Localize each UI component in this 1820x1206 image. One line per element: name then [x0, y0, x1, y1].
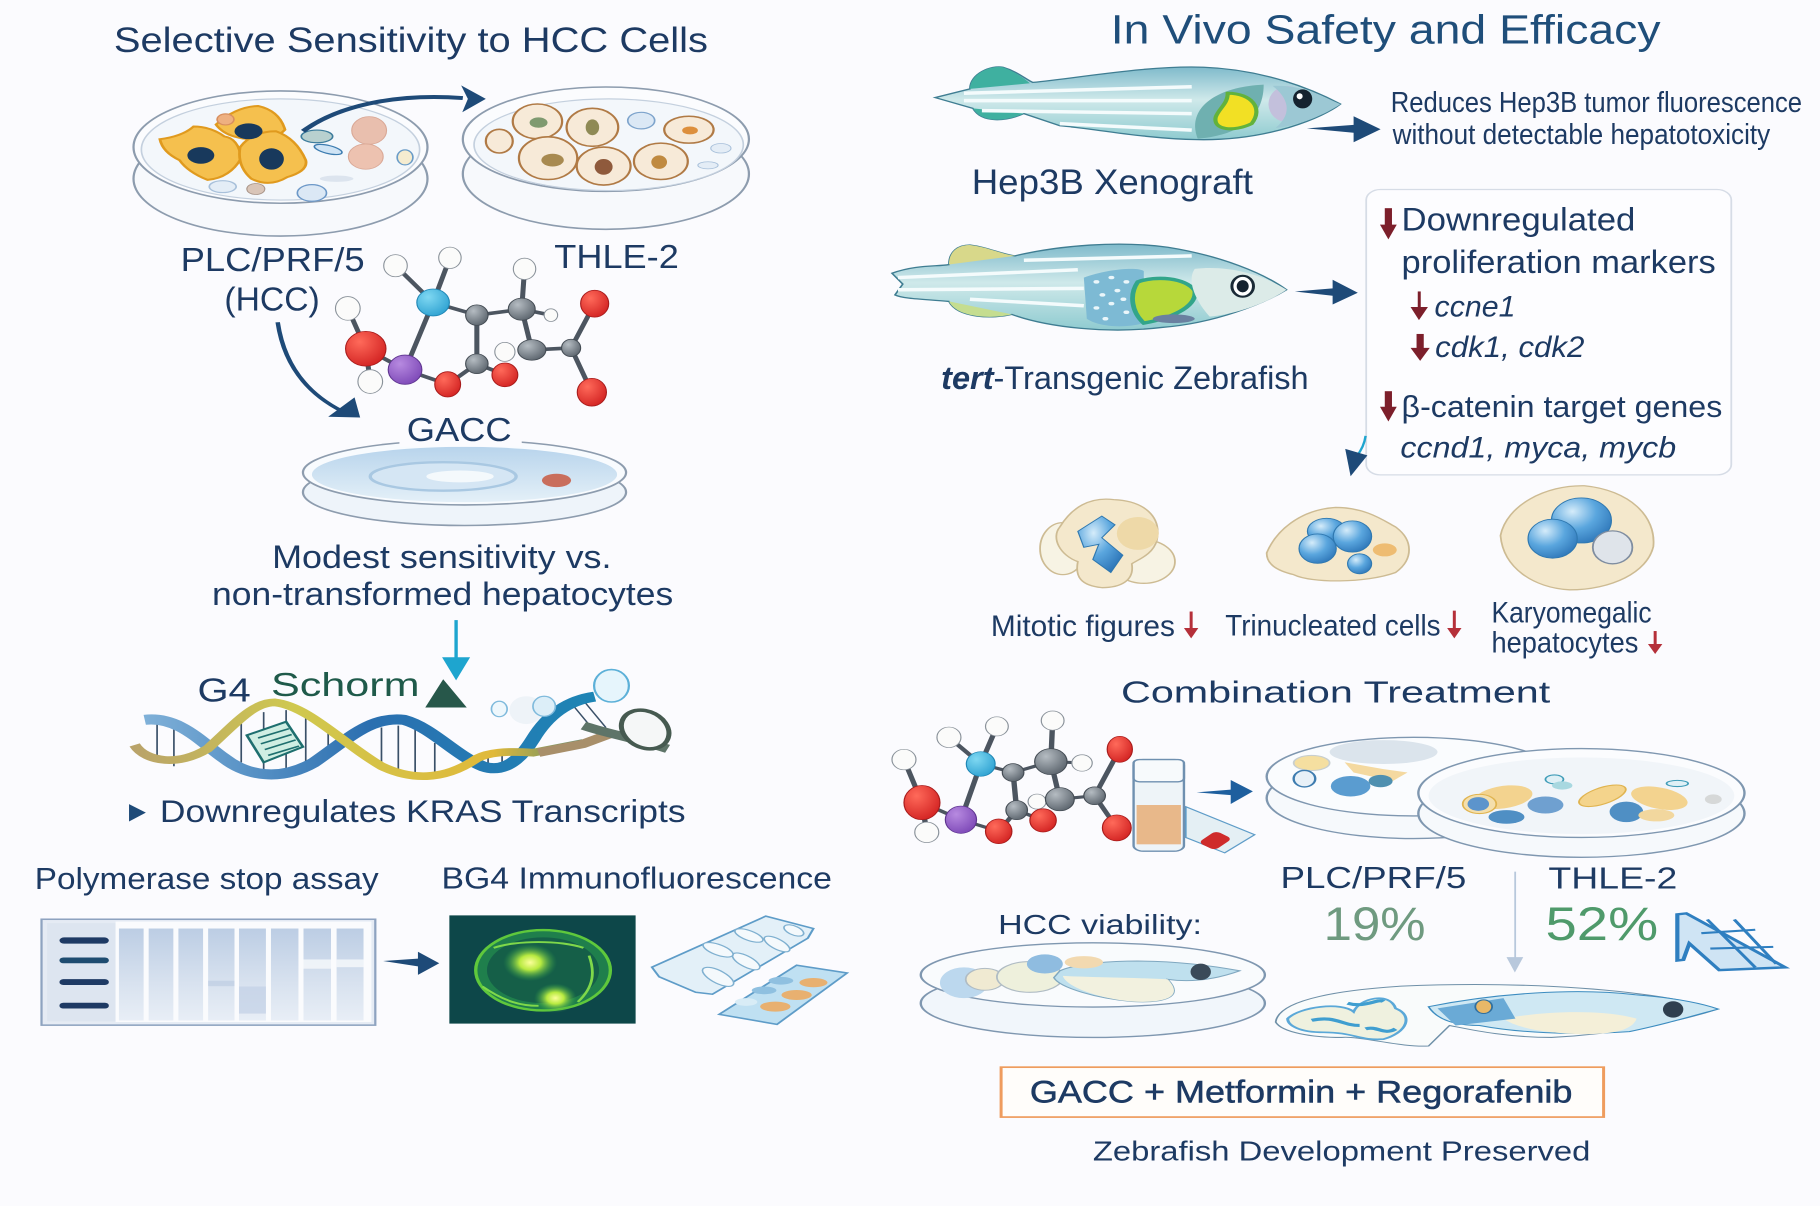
- icon: trinucleated cell: [1267, 507, 1409, 581]
- arrow: ccne1: [1411, 291, 1428, 320]
- text: downregulated proliferation markers: Downregulated: [1402, 202, 1635, 238]
- label: BG4 immunofluorescence: BG4 Immunofluorescence: [442, 861, 832, 896]
- arrow: cdk1 cdk2: [1411, 334, 1430, 361]
- panel: G4 and assays: [35, 620, 847, 1025]
- petri dish: front THLE-2 combination: [1418, 749, 1744, 857]
- title: in vivo safety: In Vivo Safety and Efficacy: [1111, 8, 1661, 52]
- value: 52 percent: 52%: [1545, 898, 1658, 951]
- gene: ccne1: ccne1: [1435, 290, 1515, 323]
- heading: combination treatment: Combination Treatment: [1121, 676, 1550, 709]
- label: trinucleated cells decreased: Trinucleated cells: [1225, 609, 1441, 642]
- icon: karyomegalic hepatocyte: [1500, 486, 1654, 590]
- icon: drug bottle and blister: [1134, 760, 1255, 853]
- arrow: HCC to GACC dish: [278, 322, 360, 418]
- illustration: preserved zebrafish larva: [1276, 985, 1718, 1046]
- label: THLE-2: THLE-2: [554, 238, 679, 275]
- arrow: cyan down: [442, 620, 470, 680]
- panel: in vivo safety and efficacy: [892, 8, 1802, 659]
- gene: ccnd1 myca mycb: ccnd1, myca, mycb: [1400, 431, 1676, 464]
- arrow: downregulated: [1380, 208, 1397, 239]
- arrow: xenograft to result: [1307, 116, 1381, 142]
- panel: selective sensitivity to HCC cells: [114, 21, 749, 612]
- arrow: assay to immunofluorescence: [383, 952, 439, 975]
- label: karyomegalic hepatocytes decreased: Karyomegalic: [1491, 596, 1652, 629]
- label: PLC/PRF/5 (HCC): [181, 241, 365, 318]
- text: downregulated proliferation markers: proliferation markers: [1402, 244, 1716, 281]
- petri dish: back PLC/PRF/5 combination: [1267, 737, 1560, 839]
- gene: cdk1 cdk2: cdk1, cdk2: [1435, 330, 1585, 364]
- label: THLE-2: THLE-2: [1548, 862, 1677, 896]
- arrow: HCC dish to THLE-2 dish: [303, 85, 486, 131]
- label: polymerase stop assay: Polymerase stop assay: [35, 862, 379, 896]
- label: G4: G4: [197, 671, 251, 708]
- icon: multiwell plate: [1677, 913, 1785, 970]
- label: PLC/PRF/5: PLC/PRF/5: [1280, 861, 1466, 895]
- label: karyomegalic hepatocytes decreased: hepatocytes: [1491, 626, 1638, 659]
- text: zebrafish development preserved: Zebrafish Development Preserved: [1093, 1137, 1590, 1167]
- text: modest sensitivity: non-transformed hepatocytes: [212, 576, 673, 612]
- value: 19 percent: 19%: [1324, 898, 1426, 951]
- arrow: thin down: [1506, 872, 1523, 972]
- text: reduces Hep3B fluorescence: [1391, 87, 1802, 151]
- panel: downregulated markers box: [1366, 190, 1731, 475]
- petri dish: embryo with cells: [921, 943, 1265, 1037]
- arrow: zebrafish to markers: [1295, 280, 1358, 304]
- label: PLC/PRF/5 (HCC): (HCC): [224, 280, 320, 318]
- arrow: markers to histology: [1345, 436, 1367, 476]
- text: downregulated proliferation markers: [1402, 202, 1716, 281]
- illustration: DNA helix with G4: [135, 670, 678, 776]
- panel: combination treatment: [892, 676, 1785, 1167]
- text: modest sensitivity: [212, 540, 673, 612]
- label: PLC/PRF/5 (HCC): PLC/PRF/5: [181, 241, 365, 278]
- label: karyomegalic hepatocytes decreased: [1491, 596, 1662, 659]
- label: Schorm: Schorm: [271, 665, 420, 703]
- icon: mitotic figures cell: [1040, 499, 1175, 588]
- label: HCC viability: HCC viability:: [998, 909, 1202, 940]
- icon: play bullet: [129, 804, 146, 821]
- illustration: tert transgenic zebrafish: [892, 244, 1286, 330]
- icon: green triangle: [425, 679, 467, 707]
- label: mitotic figures decreased: Mitotic figures: [991, 610, 1175, 643]
- callout: GACC metformin regorafenib: [1001, 1067, 1604, 1117]
- arrow: drug to dishes: [1197, 780, 1253, 804]
- arrow: beta-catenin: [1380, 391, 1397, 422]
- text: beta-catenin target genes: β-catenin target genes: [1402, 389, 1722, 424]
- label: tert-transgenic zebrafish: tert-Transgenic Zebrafish: [941, 360, 1309, 396]
- molecule: GACC combination: [892, 711, 1132, 844]
- petri dish: THLE-2 normal hepatocytes: [463, 87, 749, 229]
- image: BG4 immunofluorescence cell: [449, 915, 636, 1024]
- gel: polymerase stop assay: [42, 919, 375, 1025]
- petri dish: PLC/PRF/5 HCC cells: [134, 91, 427, 236]
- label: Hep3B xenograft: Hep3B Xenograft: [972, 162, 1253, 202]
- illustration: Hep3B xenograft zebrafish: [935, 67, 1340, 140]
- petri dish: GACC treated: [303, 435, 626, 525]
- text: downregulates KRAS transcripts: Downregulates KRAS Transcripts: [160, 794, 686, 829]
- icon: blister packs: [652, 916, 847, 1024]
- text: modest sensitivity: Modest sensitivity vs.: [272, 540, 611, 576]
- label: GACC: GACC: [407, 411, 512, 448]
- molecule: GACC: [335, 247, 609, 406]
- title: selective sensitivity: Selective Sensitivity to HCC Cells: [114, 21, 708, 60]
